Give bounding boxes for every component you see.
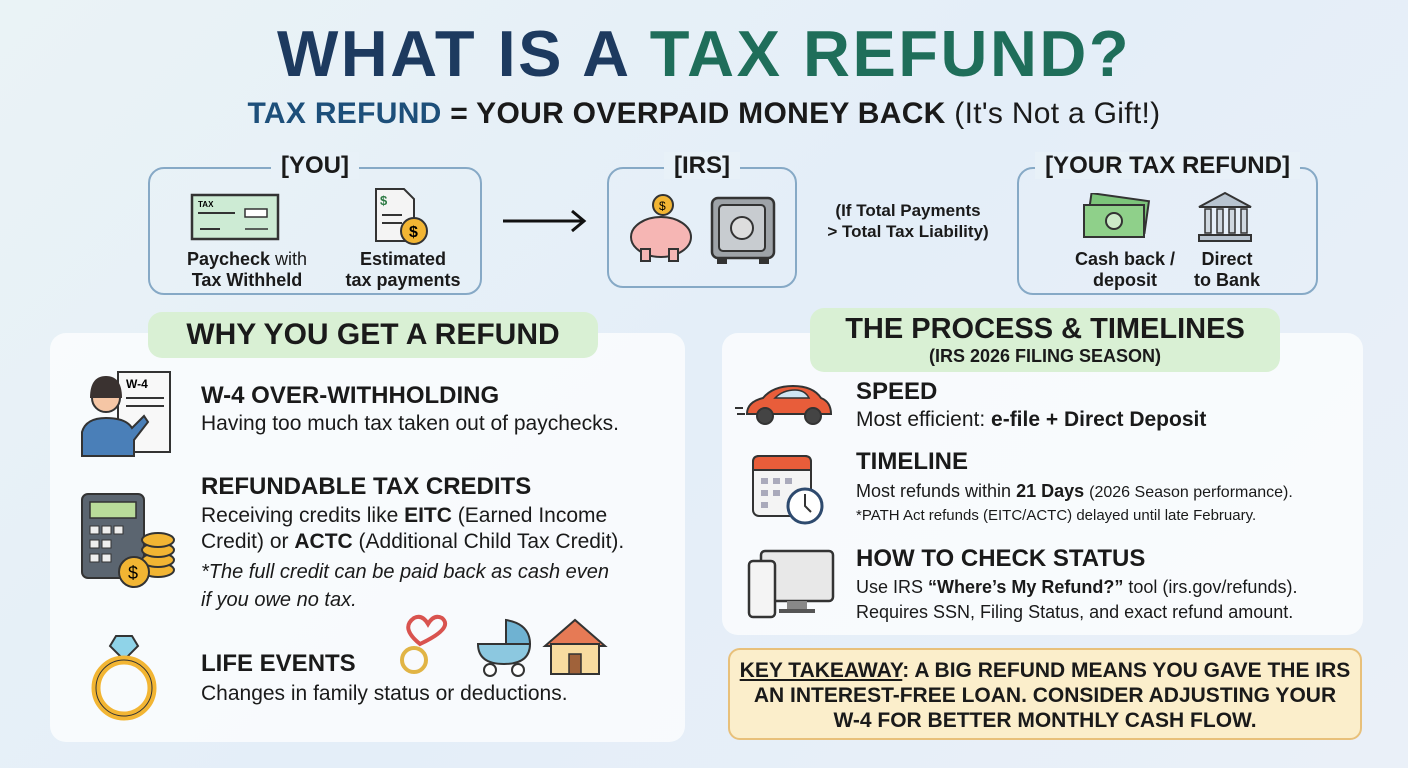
panel: irs [607,167,797,288]
icon: paycheck: TAX [198,200,214,209]
heading: why: WHY YOU GET A REFUND [186,318,560,351]
text: direct to bank [1194,249,1260,290]
text: estimated: Estimated [360,249,446,269]
heading: process [810,308,1280,372]
text: credits desc: Receiving credits like EITC (Earned Income [201,504,607,527]
text: direct to bank: to Bank [1194,270,1260,290]
icon: woman with W-4: W-4 [126,377,148,391]
icon: safe [710,196,776,264]
text: credits note: if you owe no tax. [201,589,357,611]
item: timeline [752,448,1293,524]
panel: process [722,333,1363,635]
text: direct to bank: Direct [1201,249,1253,269]
text: timeline title: TIMELINE [856,448,968,475]
icon: woman with W-4 [81,371,171,457]
heading: process: (IRS 2026 FILING SEASON) [929,346,1161,366]
text: estimated [345,249,461,290]
item: speed [735,378,1206,431]
text: w-4 desc: Having too much tax taken out of paychecks. [201,412,619,435]
icon: calculator and coins: $ [128,563,138,583]
text: status desc: Requires SSN, Filing Status, and exact refund amount. [856,602,1293,622]
text: [YOUR TAX REFUND] [1045,152,1290,179]
icon: estimated tax [375,188,428,245]
text: life title: LIFE EVENTS [201,650,356,677]
condition text: (If Total Payments [835,201,981,220]
subtitle: TAX REFUND = YOUR OVERPAID MONEY BACK (It's Not a Gift!) [248,97,1160,130]
icon: calculator and coins [81,493,175,588]
heading: why [148,312,598,358]
icon: estimated tax: $ [409,224,418,241]
icon: bank [1198,192,1252,242]
icon: cash [1083,193,1150,238]
text: credits desc: Credit) or ACTC (Additional Child Tax Credit). [201,530,624,553]
text: cash back [1075,249,1175,290]
text: status desc [856,577,1297,622]
text: life desc: Changes in family status or deductions. [201,682,568,705]
text: [YOU] [281,152,349,179]
item: check status [748,545,1297,622]
icon: estimated tax: $ [380,193,388,208]
text: paycheck: Tax Withheld [192,270,302,290]
text: credits note [201,561,609,611]
arrow [503,210,586,232]
text: status title: HOW TO CHECK STATUS [856,545,1145,572]
icon: race car [735,385,832,425]
callout: key takeaway: AN INTEREST-FREE LOAN. CONSIDER ADJUSTING YOUR [754,684,1336,707]
text: credits title: REFUNDABLE TAX CREDITS [201,473,531,500]
text: status desc: Use IRS “Where’s My Refund?” tool (irs.gov/refunds). [856,577,1297,597]
text: timeline desc: Most refunds within 21 Days (2026 Season performance). [856,481,1293,501]
icon: paycheck [190,194,280,240]
callout: key takeaway [728,648,1362,740]
panel: why you get a refund [50,333,685,742]
item: w-4 [81,371,619,457]
condition text: > Total Tax Liability) [827,222,989,241]
text: w-4 title: W-4 OVER-WITHHOLDING [201,382,499,409]
panel: your tax refund [1017,167,1318,295]
text: credits desc [201,504,624,553]
callout: key takeaway: KEY TAKEAWAY: A BIG REFUND MEANS YOU GAVE THE IRS [740,659,1350,682]
icon: ring [92,635,156,720]
text: speed title: SPEED [856,378,937,405]
text: paycheck [187,249,307,290]
icon: calendar clock [752,455,824,524]
panel: you [148,167,482,295]
icon: piggy bank: $ [659,199,666,213]
text: cash back: Cash back / [1075,249,1175,269]
icon: piggy bank [630,194,692,262]
title: WHAT IS A TAX REFUND? [277,17,1131,90]
item: life events [92,614,608,720]
item: refundable credits [81,473,624,611]
heading: process: THE PROCESS & TIMELINES [845,313,1245,345]
icons: life events [400,614,608,677]
text: paycheck: Paycheck with [187,249,307,269]
text: speed desc: Most efficient: e-file + Direct Deposit [856,408,1206,431]
text: estimated: tax payments [345,270,461,290]
text: cash back: deposit [1093,270,1157,290]
text: timeline note: *PATH Act refunds (EITC/ACTC) delayed until late February. [856,507,1256,524]
icon: devices [748,550,834,618]
condition text [827,201,989,241]
callout: key takeaway: W-4 FOR BETTER MONTHLY CASH FLOW. [833,709,1257,732]
text: credits note: *The full credit can be paid back as cash even [201,561,609,583]
text: [IRS] [674,152,730,179]
